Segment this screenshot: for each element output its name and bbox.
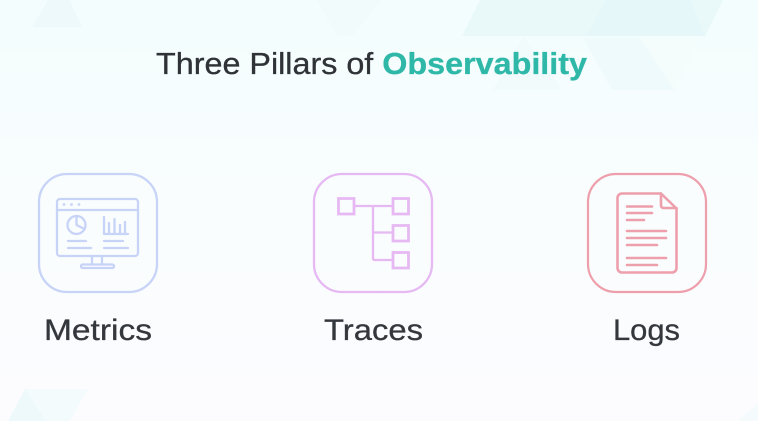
label: metrics: Metrics (44, 314, 152, 347)
panel: metrics (39, 174, 157, 347)
icon dots (63, 203, 80, 206)
icon: metrics dashboard monitor (39, 174, 157, 292)
label: traces: Traces (324, 314, 423, 347)
panel: traces (314, 174, 432, 347)
icon: trace tree (314, 174, 432, 292)
title: Three Pillars of Observability (156, 46, 588, 81)
panel: logs (588, 174, 706, 347)
icon: log document (588, 174, 706, 292)
label: logs: Logs (613, 314, 680, 347)
